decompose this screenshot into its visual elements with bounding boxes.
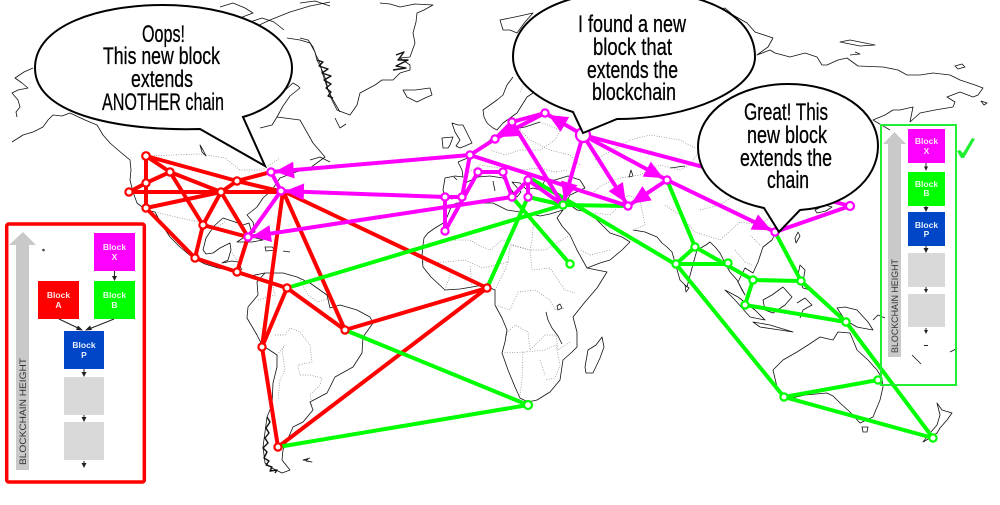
block X xyxy=(94,233,135,271)
block X: X xyxy=(112,252,118,262)
magenta network nodes xyxy=(244,109,854,241)
country borders xyxy=(146,60,777,405)
icon: green check mark xyxy=(957,138,975,158)
block X: X xyxy=(924,146,930,156)
block B: B xyxy=(923,188,930,198)
speech bubble: new block extends another chain: This new block xyxy=(103,43,221,70)
blockchain height arrow: BLOCKCHAIN HEIGHT xyxy=(18,358,29,465)
grey ancestor blocks xyxy=(908,253,945,327)
speech bubble: found a new block xyxy=(513,0,755,133)
block P xyxy=(64,331,104,369)
speech bubble: new block extends another chain: ANOTHER chain xyxy=(102,89,224,116)
red network nodes xyxy=(125,152,491,451)
magenta network links and arrows xyxy=(248,113,850,237)
block P xyxy=(908,212,945,246)
chain arrows xyxy=(924,163,928,346)
block B: Block xyxy=(103,290,126,300)
speech bubble: found a new block: blockchain xyxy=(592,79,676,106)
green network nodes xyxy=(524,201,937,442)
block P: Block xyxy=(915,220,938,230)
block P: P xyxy=(924,229,930,239)
speech bubble: new block extends the chain: new block xyxy=(747,122,828,149)
block X: Block xyxy=(915,136,938,146)
speech bubble: new block extends another chain: extends xyxy=(131,66,193,93)
block A: Block xyxy=(47,290,70,300)
blockchain height arrow xyxy=(9,232,36,470)
speech bubble: found a new block: block that xyxy=(593,34,672,61)
blockchain height arrow xyxy=(883,132,906,357)
block B xyxy=(94,281,135,319)
block B: B xyxy=(111,300,118,310)
red network links xyxy=(129,156,487,447)
grey ancestor blocks xyxy=(64,377,104,460)
speech bubble: found a new block: I found a new xyxy=(578,11,686,38)
block X xyxy=(908,129,945,163)
speech bubble: new block extends the chain: chain xyxy=(767,167,809,194)
speech bubble: new block extends another chain: Oops! xyxy=(142,21,185,48)
green network links xyxy=(278,180,933,447)
speech bubble: found a new block: extends the xyxy=(587,57,678,84)
panel: forked blockchain with block A and block B xyxy=(7,224,144,482)
speech bubble: new block extends the chain: extends the xyxy=(740,145,832,172)
block A: A xyxy=(55,300,62,310)
block A xyxy=(38,281,79,319)
block X: Block xyxy=(103,242,126,252)
chain arrows xyxy=(42,249,117,468)
block P: P xyxy=(81,350,87,360)
panel: single valid chain X B P xyxy=(881,125,975,385)
block P: Block xyxy=(72,340,96,350)
blockchain height arrow: BLOCKCHAIN HEIGHT xyxy=(890,259,900,353)
speech bubble: new block extends the chain xyxy=(698,84,878,232)
block B xyxy=(908,172,945,206)
speech bubble: new block extends the chain: Great! This xyxy=(744,99,828,126)
block B: Block xyxy=(915,179,938,189)
speech bubble: new block extends another chain xyxy=(35,5,292,166)
